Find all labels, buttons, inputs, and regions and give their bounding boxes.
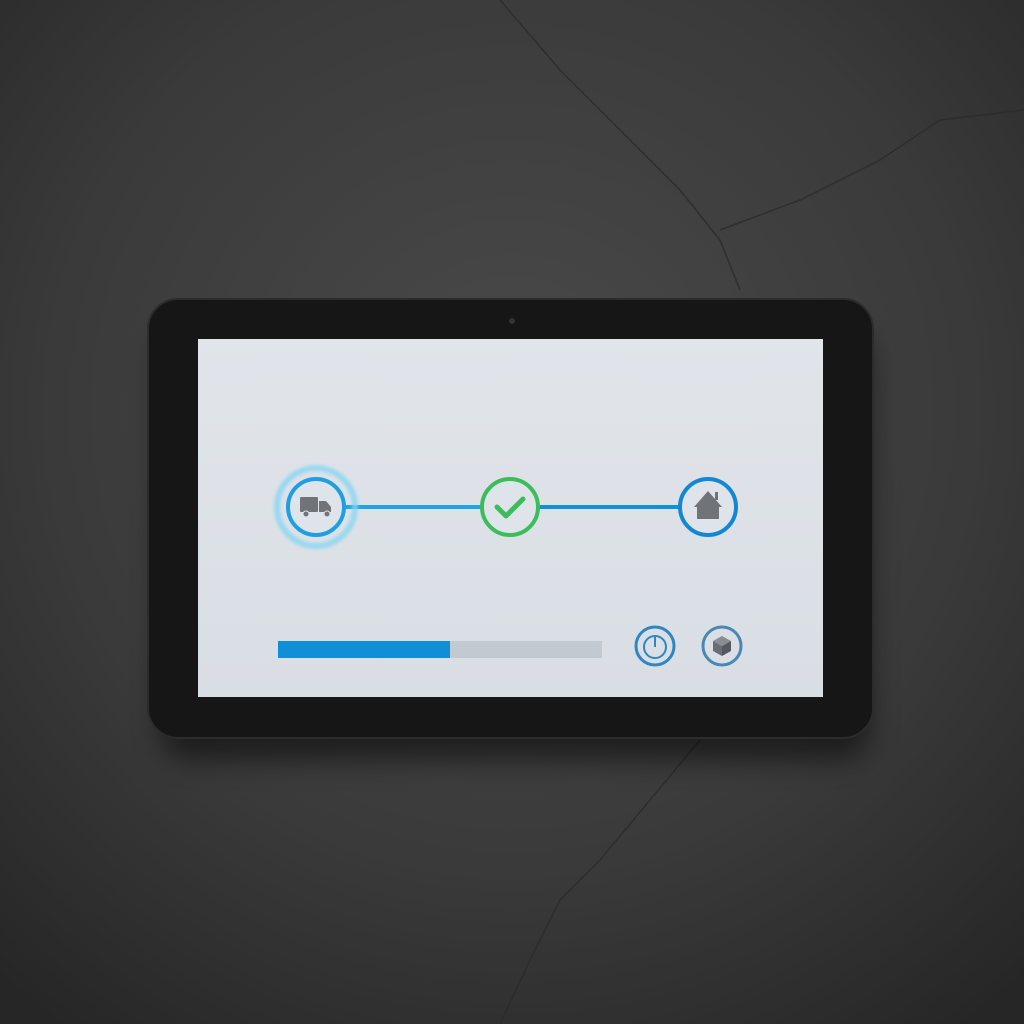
icon: power/timer bbox=[636, 627, 674, 665]
step 2: check bbox=[482, 479, 538, 535]
tablet device bbox=[148, 299, 873, 738]
step 3: home bbox=[680, 479, 736, 535]
progress bar bbox=[278, 641, 602, 658]
camera bbox=[509, 318, 515, 324]
step 1: truck (active) bbox=[277, 468, 355, 546]
icon: box bbox=[703, 627, 741, 665]
connector lines bbox=[346, 505, 481, 509]
wall cracks bbox=[500, 0, 1024, 1024]
screen bbox=[198, 339, 823, 697]
tablet shadow bbox=[160, 330, 870, 760]
progress stepper bbox=[277, 468, 736, 546]
